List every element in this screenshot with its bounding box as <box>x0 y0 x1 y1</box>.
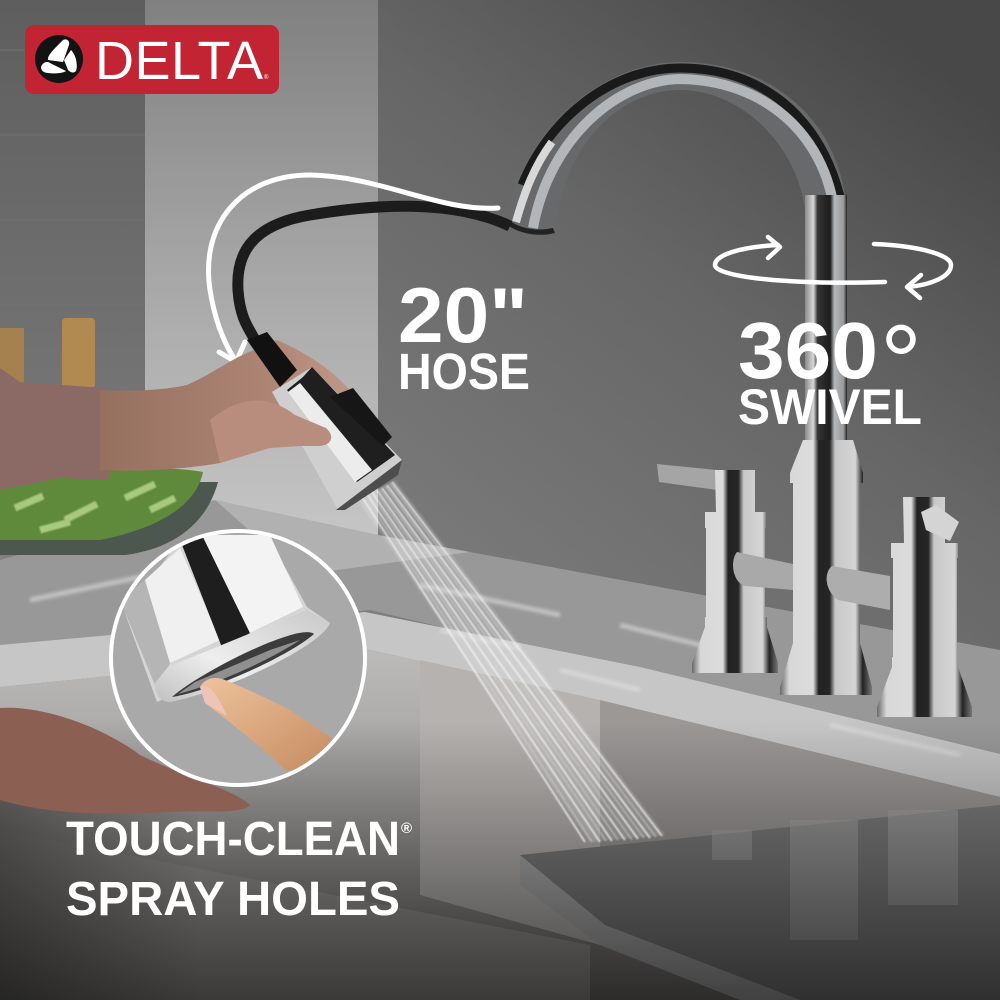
sink <box>0 650 1000 1000</box>
arrow: hose reach <box>208 175 498 362</box>
spray <box>358 480 665 842</box>
sleeve <box>0 368 110 490</box>
inset circle: touch-clean spray holes <box>109 529 367 787</box>
label: touch-clean spray holes: ® <box>401 820 412 837</box>
logo: Delta: ® <box>264 74 269 81</box>
label: 360 swivel: ° <box>880 304 922 421</box>
sprayer collar <box>247 332 297 387</box>
right valve <box>877 497 972 717</box>
label: 360 swivel: SWIVEL <box>738 379 922 435</box>
thumb <box>210 401 331 463</box>
hose <box>238 206 510 345</box>
lower counter foreground <box>0 805 1000 1000</box>
label: touch-clean spray holes: SPRAY HOLES <box>66 873 400 926</box>
left valve <box>692 470 778 673</box>
label: 360 swivel <box>738 304 922 435</box>
left handle <box>657 464 717 490</box>
bottom shade <box>0 720 1000 1000</box>
left connector <box>733 552 793 590</box>
right handle knob <box>921 505 959 541</box>
lower hand <box>0 708 250 814</box>
fingertip <box>200 678 332 771</box>
upper hand with sprayer <box>100 332 402 510</box>
countertop <box>0 500 1000 797</box>
logo: Delta <box>25 25 279 94</box>
label: touch-clean spray holes: TOUCH-CLEAN <box>66 813 400 866</box>
label: 360 swivel: 360 <box>738 306 878 395</box>
sprayer body <box>272 367 402 510</box>
center body <box>780 440 872 695</box>
label: 20 inch hose <box>398 271 530 400</box>
label: 20 inch hose: 20" <box>398 271 528 359</box>
right connector <box>827 566 890 610</box>
spout arc <box>503 62 847 475</box>
label: touch-clean spray holes <box>66 813 412 926</box>
logo: Delta: DELTA <box>95 31 263 91</box>
salad bowl <box>0 318 218 555</box>
label: 20 inch hose: HOSE <box>398 343 530 400</box>
icon: swivel arrows <box>715 237 951 298</box>
faucet <box>503 62 972 717</box>
